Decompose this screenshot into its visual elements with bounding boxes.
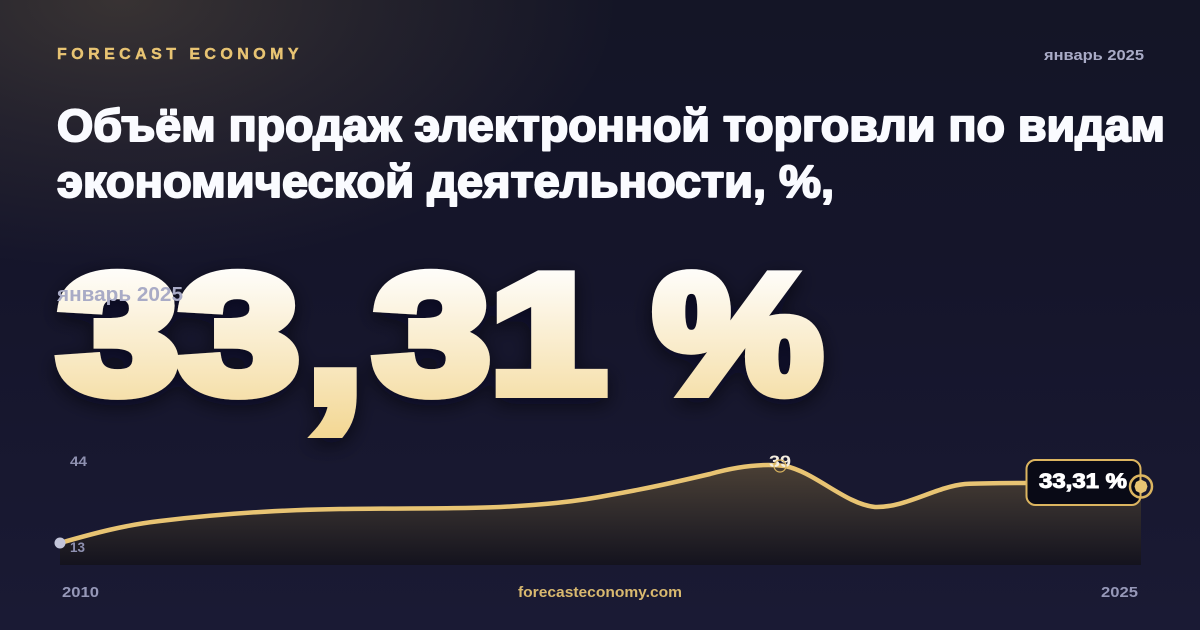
start marker	[54, 538, 66, 548]
line chart	[54, 452, 1152, 565]
area fill	[60, 465, 1141, 565]
brand label: FORECAST ECONOMY	[57, 46, 303, 63]
source: forecasteconomy.com	[518, 585, 682, 601]
title	[57, 100, 1165, 207]
axis bottom label: 13	[70, 540, 85, 555]
max label: 39	[769, 452, 791, 471]
date overlay: январь 2025	[56, 284, 183, 306]
big value	[58, 222, 822, 445]
end marker	[1130, 476, 1152, 498]
max marker	[774, 460, 786, 472]
big value: ,	[304, 222, 366, 445]
big value: %	[654, 240, 822, 428]
big value: 31	[374, 240, 606, 428]
title: Объём продаж электронной торговли по видам	[57, 100, 1165, 151]
year start: 2010	[62, 585, 99, 601]
current value callout: 33,31 %	[1039, 470, 1127, 493]
date top right: январь 2025	[1044, 47, 1144, 64]
current value callout	[1026, 460, 1140, 505]
title: экономической деятельности, %,	[57, 156, 834, 207]
line	[60, 465, 1141, 543]
year end: 2025	[1101, 585, 1138, 601]
axis top label: 44	[70, 454, 88, 469]
big value: 33	[58, 240, 299, 428]
